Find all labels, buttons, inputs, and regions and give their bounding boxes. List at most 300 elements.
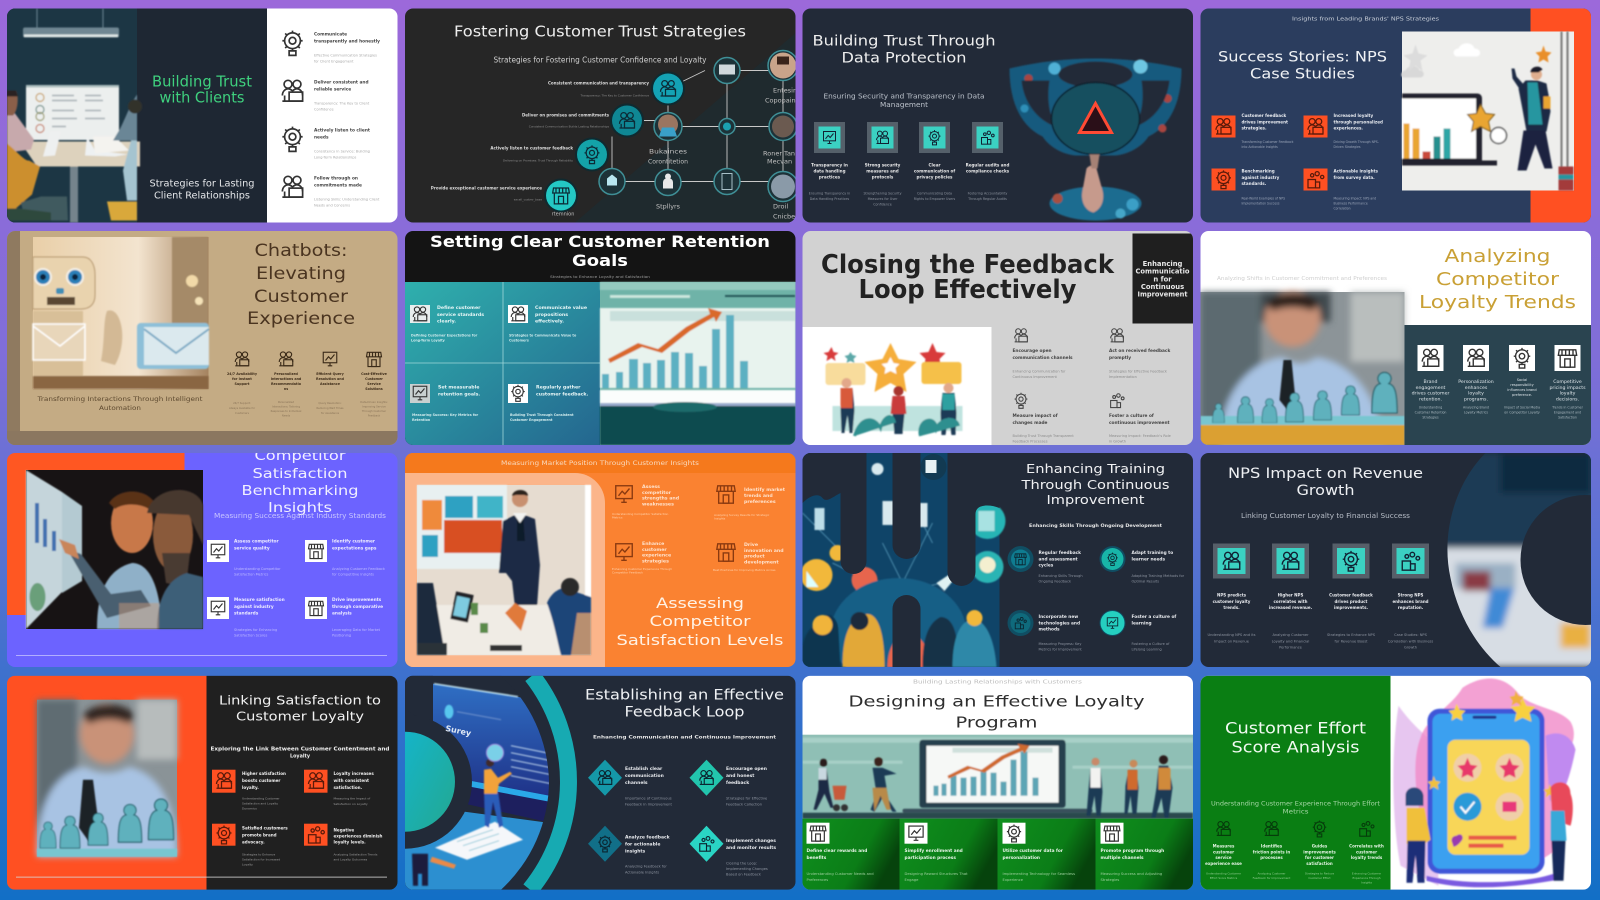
four items: and monitor results: [726, 845, 776, 851]
item text: Fostering Accountability: [968, 192, 1007, 196]
four items: Identify customer: [332, 540, 375, 544]
item text: customer loyalty: [1213, 599, 1251, 604]
four items: Analyze feedback: [625, 836, 670, 841]
title: Designing an Effective Loyalty: [848, 693, 1145, 711]
four features: ns: [284, 387, 288, 391]
four items: Higher satisfaction: [242, 771, 286, 776]
panel: Assessing Competitor Satisfaction Levels: [405, 453, 796, 667]
four features: Efficient Query: [316, 372, 344, 376]
title: Feedback Loop: [624, 705, 745, 721]
network diagram: [546, 50, 799, 220]
item text: reputation.: [1398, 605, 1424, 610]
four items: Regular feedback: [1038, 551, 1081, 556]
four items: Satisfaction on Loyalty: [334, 802, 368, 806]
title: [431, 235, 769, 266]
four items: Fostering a Culture of: [1132, 642, 1169, 646]
teal goal grid: Define customer: [437, 306, 480, 311]
four items: loyalty.: [242, 785, 259, 790]
title: Assessing: [656, 596, 744, 612]
photo: man with figures: [1200, 291, 1404, 445]
four features: Resolution and: [316, 377, 345, 381]
item text: Regular audits and: [966, 162, 1009, 168]
four items: Satisfaction Metrics: [234, 572, 269, 576]
four items: service: [1215, 855, 1232, 860]
item text: Strategies to Enhance NPS: [1327, 633, 1375, 637]
four items: promote brand: [242, 833, 277, 838]
photo: presenter in meeting: [417, 485, 591, 655]
panel: Closing the Feedback Loop Effectively: [802, 231, 1193, 445]
title: Analyzing: [1444, 246, 1550, 267]
four items: Strategies to Enhance: [242, 853, 275, 857]
dark feature block: Satisfaction: [1558, 416, 1577, 420]
four features: Cost-Effective: [361, 372, 387, 376]
image: analyst with chart: [1401, 32, 1574, 190]
illustration: dashboard and shoppers: [802, 735, 1193, 819]
teal goal grid: Customer Engagement: [510, 418, 553, 422]
four items: communication: [625, 773, 664, 779]
four items: Importance of Continuous: [625, 797, 672, 801]
image: people and stars: [802, 327, 992, 445]
subtitle: Client Relationships: [154, 190, 250, 202]
dark feature block: loyalty: [1468, 391, 1484, 397]
panel: Enhancing Training Through Continuous Improvement: [800, 453, 1193, 688]
items: Transforming Customer Feedback: [1242, 140, 1293, 144]
item text: increased revenue.: [1269, 605, 1313, 610]
title: [1419, 246, 1576, 313]
four items: channels: [625, 780, 648, 786]
white strategy column: Long-Term Relationships: [314, 156, 356, 160]
item text: Growth: [1404, 646, 1417, 650]
item text: Higher NPS: [1278, 592, 1303, 598]
four items: feedback: [726, 780, 750, 786]
subtitle: [38, 396, 202, 410]
image: network hand with people: [800, 453, 1006, 688]
teal goal grid: Measuring Success: Key Metrics for: [412, 413, 478, 417]
item text: improvements.: [1334, 605, 1368, 610]
title: Setting Clear Customer Retention: [430, 232, 770, 251]
teal goal grid: Regularly gather: [536, 386, 580, 390]
network diagram: Roner Tanl: [763, 150, 797, 158]
four items: Negative: [334, 828, 354, 833]
title: Customer Effort: [1225, 719, 1366, 738]
title: Insights: [268, 500, 332, 516]
title: Goals: [572, 251, 628, 270]
white strategy column: Effective Communication Strategies: [314, 54, 377, 58]
four items: Satisfaction Scores: [234, 633, 267, 637]
teal goal grid: clearly.: [437, 319, 456, 325]
dark feature block: on Competitor Loyalty: [1504, 410, 1540, 414]
four green columns: personalization: [1002, 855, 1040, 861]
four items: customer: [1213, 849, 1234, 854]
subtitle: Enhancing Skills Through Ongoing Development: [1029, 523, 1162, 529]
four items: Understanding Customer: [242, 797, 280, 801]
image: trophy: [1010, 58, 1182, 220]
four items: Analyzing Survey Results for Strategic: [714, 513, 769, 517]
strategy labels: [431, 80, 649, 202]
white strategy column: Actively listen to client: [314, 128, 370, 134]
four items: Loyalty increases: [334, 771, 374, 776]
title: [848, 693, 1145, 732]
four items: Satisfaction for Increased: [242, 858, 280, 862]
four items: Positioning: [332, 633, 351, 637]
four items: satisfaction: [1306, 861, 1333, 866]
four items: Feedback for Improvement: [1253, 876, 1291, 880]
teal goal grid: customer feedback.: [536, 391, 589, 397]
dark feature block: Impact of Social Media: [1504, 406, 1540, 410]
title: [585, 688, 784, 721]
four items: Adapt training to: [1132, 551, 1173, 556]
four features: Recommendatio: [271, 382, 302, 386]
four features: Assistance: [320, 382, 341, 386]
dark feature block: Social: [1517, 378, 1527, 382]
item text: Impact on Revenue: [1214, 639, 1250, 643]
strategy labels: Transparency: The Key to Customer Confidence: [580, 94, 649, 98]
item text: Understanding NPS and its: [1207, 633, 1256, 637]
items: experiences.: [1334, 126, 1363, 131]
title: with Clients: [160, 88, 245, 106]
items: Benchmarking: [1242, 168, 1275, 174]
four actions: Act on received feedback: [1109, 349, 1170, 354]
white strategy column: needs: [314, 134, 329, 140]
four items: Effort Score Metrics: [1210, 876, 1238, 880]
item text: Clear: [929, 162, 940, 168]
four features: [227, 352, 388, 418]
four actions: changes made: [1012, 420, 1048, 426]
four items: Analyzing Customer: [1257, 872, 1286, 876]
four items: methods: [1038, 627, 1060, 633]
four items: Enhancing Skills Through: [1038, 574, 1083, 578]
black callout: [1132, 234, 1193, 324]
title: Elevating: [256, 264, 346, 284]
dark feature block: Trends in Customer: [1552, 406, 1583, 410]
panel: Analyzing Competitor Loyalty Trends: [1200, 231, 1591, 445]
four green columns: participation process: [904, 855, 956, 861]
four items: cycles: [1038, 563, 1054, 569]
four items: boosts customer: [242, 778, 280, 783]
four items: for actionable: [625, 842, 660, 848]
item text: Case Studies: NPS: [1394, 633, 1427, 637]
subtitle: Ensuring Security and Transparency in Data: [824, 92, 985, 100]
four features: Service: [367, 382, 382, 386]
white strategy column: commitments made: [314, 182, 362, 188]
four features: Data-Driven Insights:: [360, 401, 388, 404]
four items: competitor: [642, 490, 672, 496]
item text: drives product: [1335, 599, 1368, 604]
subtitle: Transforming Interactions Through Intelligent: [36, 395, 203, 403]
four green columns: Preferences: [806, 878, 828, 882]
four features: Customer: [365, 377, 383, 381]
items: Customer feedback: [1242, 113, 1286, 118]
title: Experience: [247, 309, 355, 329]
four items: customer: [1356, 849, 1377, 854]
network diagram: rtemnion: [552, 212, 574, 218]
dark feature block: Customer Retention: [1415, 410, 1446, 414]
four actions: promptly: [1109, 355, 1131, 361]
four items: Lifelong Learning: [1132, 648, 1162, 652]
item text: Data Handling Practices: [810, 197, 850, 201]
items: from survey data.: [1334, 175, 1375, 180]
item text: Loyalty and Financial: [1272, 639, 1309, 643]
dark feature block: decisions.: [1556, 396, 1579, 402]
four items: Strategies for Enhancing: [234, 628, 277, 632]
four features: Reducing Wait Times: [316, 406, 344, 410]
network diagram: Entesin: [773, 86, 797, 94]
four items: [212, 770, 383, 867]
white strategy column: Follow through on: [314, 176, 358, 182]
subtitle: [210, 747, 390, 760]
title: [219, 693, 381, 724]
four actions: Implementation: [1109, 375, 1137, 379]
panel: Building Trust with Clients: [7, 8, 398, 222]
four items: experience ease: [1205, 861, 1242, 866]
four items: Adapting Training Methods for: [1132, 574, 1184, 578]
four green columns: Simplify enrollment and: [904, 849, 963, 854]
four items: Enhancing Customer: [1352, 872, 1381, 876]
subtitle: Measuring Success Against Industry Standards: [214, 512, 387, 520]
network diagram: Bukainces: [649, 148, 688, 156]
items: Driven Strategies: [1334, 145, 1361, 149]
dark feature block: influences brand: [1507, 388, 1537, 392]
title: Customer: [254, 287, 348, 307]
subtitle: Strategies to Enhance Loyalty and Satisfaction: [550, 275, 651, 279]
four green columns: Designing Reward Structures That: [904, 872, 968, 876]
white strategy column: Confidence: [314, 108, 334, 112]
four items: Feedback Collection: [726, 803, 762, 807]
title: Success Stories: NPS: [1218, 50, 1387, 66]
four items: strategies: [642, 558, 669, 564]
teal goal grid: Retention: [412, 418, 431, 422]
item text: [1207, 592, 1433, 650]
item text: Rights to Empower Users: [914, 197, 956, 201]
white strategy column: Needs and Concerns: [314, 204, 350, 208]
four items: processes: [1260, 855, 1283, 860]
title: Score Analysis: [1232, 738, 1360, 757]
item text: privacy policies: [917, 174, 953, 180]
four features: Solutions: [365, 387, 383, 391]
title: Fostering Customer Trust Strategies: [454, 22, 746, 40]
four features: 24/7 Availability: [227, 372, 257, 376]
four items: [612, 484, 786, 574]
strategy labels: Actively listen to customer feedback: [490, 146, 573, 150]
four actions: communication channels: [1012, 355, 1073, 361]
four items: weaknesses: [642, 501, 674, 507]
title: Growth: [1296, 483, 1354, 499]
four items: Enhancing Customer Experience Through: [612, 567, 672, 571]
four items: Identify market: [744, 488, 785, 493]
four green columns: Measuring Success and Adjusting: [1100, 872, 1162, 876]
four items: learner needs: [1132, 556, 1165, 562]
four items: Insights: [1361, 881, 1373, 885]
strategy labels: Provide exceptional customer service experience: [431, 186, 542, 190]
subtitle: Understanding Customer Experience Through Effort: [1211, 800, 1380, 808]
title: Through Continuous: [1020, 477, 1170, 492]
network diagram: Corontitetion: [648, 158, 688, 166]
four items: Dynamics: [242, 807, 257, 811]
dark feature block: programs.: [1464, 396, 1488, 402]
four features: Customers: [235, 411, 250, 415]
teal goal grid: retention goals.: [438, 391, 480, 397]
title: Benchmarking: [242, 483, 358, 499]
four items: Strategies to Reduce: [1305, 872, 1334, 876]
dark feature block: retention.: [1419, 396, 1442, 402]
image: blurred chart and arc: [1430, 453, 1600, 667]
four items: experience: [642, 553, 671, 559]
four items: insights: [625, 848, 646, 854]
panel: Success Stories NPS Case Studies: [1200, 8, 1591, 222]
four actions: Measuring Impact: Feedback's Role: [1109, 434, 1171, 438]
teal goal grid: propositions: [535, 312, 568, 318]
four features: for Instant: [232, 377, 252, 381]
four items: trends and: [744, 493, 773, 499]
photo: two men at a chart: [26, 470, 203, 629]
items: Actionable insights: [1334, 168, 1378, 174]
item text: practices: [819, 174, 841, 180]
strategy labels: Deliver on promises and commitments: [522, 112, 610, 118]
teal goal grid: Customers: [509, 338, 529, 342]
four actions: continuous improvement: [1109, 420, 1170, 426]
subtitle: [1211, 800, 1380, 816]
title: [242, 448, 358, 516]
four items: preferences: [744, 499, 776, 505]
four items: and honest: [726, 773, 755, 779]
kicker: Measuring Market Position Through Customer Insights: [501, 460, 699, 467]
image: robot with envelopes: [33, 237, 209, 389]
teal goal grid: Building Trust Through Consistent: [510, 413, 574, 417]
four green columns: [802, 819, 1193, 890]
teal goal grid: Long-Term Loyalty: [411, 338, 446, 342]
item text: Performance: [1279, 646, 1303, 650]
black callout: n for: [1153, 275, 1172, 283]
network diagram: Cnicben: [773, 212, 799, 220]
strategy labels: Consistent communication and transparency: [548, 80, 649, 86]
four actions: Encourage open: [1012, 349, 1052, 354]
dark feature block: engagement: [1416, 385, 1446, 391]
four items: [588, 760, 776, 877]
four items: Assess: [642, 485, 660, 490]
four items: experiences diminish: [334, 834, 383, 839]
item text: Correlation with Business: [1388, 639, 1433, 643]
four items: Closing the Loop:: [726, 862, 757, 866]
title: Competitor: [650, 614, 751, 630]
item text: Measures for User: [868, 197, 898, 201]
four items: Strategies for Effective: [726, 797, 767, 801]
subtitle: Automation: [99, 404, 141, 412]
four items: Measuring Progress: Key: [1038, 642, 1081, 646]
four green columns: Utilize customer data for: [1002, 849, 1063, 854]
four green columns: Understanding Customer Needs and: [806, 872, 874, 876]
items: against industry: [1242, 175, 1280, 180]
item text: protocols: [872, 174, 894, 180]
white strategy column: transparently and honestly: [314, 38, 380, 44]
subtitle: Management: [880, 101, 928, 109]
panel: Competitor Satisfaction Benchmarking Insights: [7, 448, 398, 667]
dark feature block: preference.: [1512, 393, 1532, 397]
item text: measures and: [866, 168, 899, 174]
four items: friction points in: [1253, 849, 1290, 854]
four items: Understanding Competitor Satisfaction: [612, 512, 668, 516]
four items: Loyalty: [242, 863, 253, 867]
four items: Measuring the Impact of: [334, 797, 370, 801]
four items: Actionable Insights: [625, 871, 659, 875]
teal goal grid: service standards: [437, 312, 484, 318]
four items: Measures: [1213, 844, 1234, 849]
item text: for Revenue Boost: [1334, 639, 1368, 643]
icon row: [814, 122, 1003, 153]
items: Real-World Examples of NPS: [1242, 196, 1285, 200]
four features: Through Customer: [362, 409, 387, 413]
image: survey illustration: Surey: [445, 724, 473, 738]
four features: 24/7 Support:: [233, 402, 251, 405]
dark feature block: drives customer: [1412, 391, 1450, 397]
subtitle: [824, 92, 984, 109]
dark feature block: responsibility: [1510, 383, 1534, 387]
network diagram: Mecvan: [767, 158, 792, 166]
photo: man with figures: [37, 700, 177, 857]
items: Increased loyalty: [1334, 113, 1373, 118]
items: [1240, 113, 1383, 210]
strategy labels: Consistent Communication Builds Lasting Relationships: [529, 124, 609, 128]
four items: Best Practices for Improving Metrics Across: [713, 568, 776, 572]
title: Loyalty Trends: [1419, 292, 1576, 313]
four items: Satisfaction and Loyalty: [242, 802, 278, 806]
subtitle: Strategies for Fostering Customer Confidence and Loyalty: [494, 56, 707, 64]
four green columns: benefits: [806, 855, 827, 861]
four items: Based on Feedback: [726, 873, 762, 877]
items: Business Performance: [1334, 202, 1368, 206]
four items: [207, 538, 386, 637]
title: [814, 34, 994, 62]
title: Satisfaction Levels: [616, 633, 784, 649]
four items: through comparative: [332, 604, 383, 610]
item text: trends.: [1223, 605, 1240, 610]
four items: [1205, 820, 1384, 885]
title: Enhancing Training: [1026, 461, 1165, 476]
four items: and assessment: [1038, 556, 1078, 562]
title: Competitor: [254, 448, 346, 464]
white strategy column: Consistency in Service: Building: [314, 150, 370, 154]
white strategy column: Communicate: [314, 32, 347, 38]
teal goal grid: Communicate value: [535, 306, 587, 311]
four items: Incorporate new: [1038, 615, 1078, 620]
subtitle: Loyalty: [290, 754, 311, 760]
teal goal grid: Strategies to Communicate Value to: [509, 334, 576, 338]
title: Linking Satisfaction to: [219, 693, 381, 708]
title: NPS Impact on Revenue: [1228, 466, 1423, 482]
four items: Implement changes: [726, 839, 776, 844]
panel: NPS Impact on Revenue Growth: [1200, 453, 1600, 667]
dark feature block: Engagement and: [1554, 410, 1581, 414]
title: Chatbots:: [254, 241, 348, 261]
four items: learning: [1132, 620, 1152, 626]
four actions: Feedback Processes: [1012, 440, 1048, 444]
four features: Responses to Individual: [271, 409, 302, 413]
strategy labels: Delivering on Promises: Trust Through Reliability: [503, 158, 573, 162]
four items: Experience Through: [1352, 876, 1381, 880]
kicker: Building Lasting Relationships with Customers: [913, 680, 1082, 686]
four features: Query Resolution:: [318, 402, 342, 405]
icon row: [1213, 544, 1429, 578]
subtitle: Linking Customer Loyalty to Financial Success: [1241, 512, 1410, 520]
title: Building Trust Through: [812, 34, 996, 50]
four green columns: Engage: [904, 878, 919, 882]
four items: Measure satisfaction: [234, 598, 285, 603]
four actions: Building Trust Through Transparent: [1012, 434, 1074, 438]
network diagram: Stpllyrs: [656, 202, 681, 210]
panel: Setting Clear Customer Retention Goals: [405, 231, 796, 445]
dark feature block: Loyalty Metrics: [1464, 410, 1488, 414]
items: standards.: [1242, 181, 1267, 186]
teal goal grid: Defining Customer Expectations for: [411, 334, 477, 338]
